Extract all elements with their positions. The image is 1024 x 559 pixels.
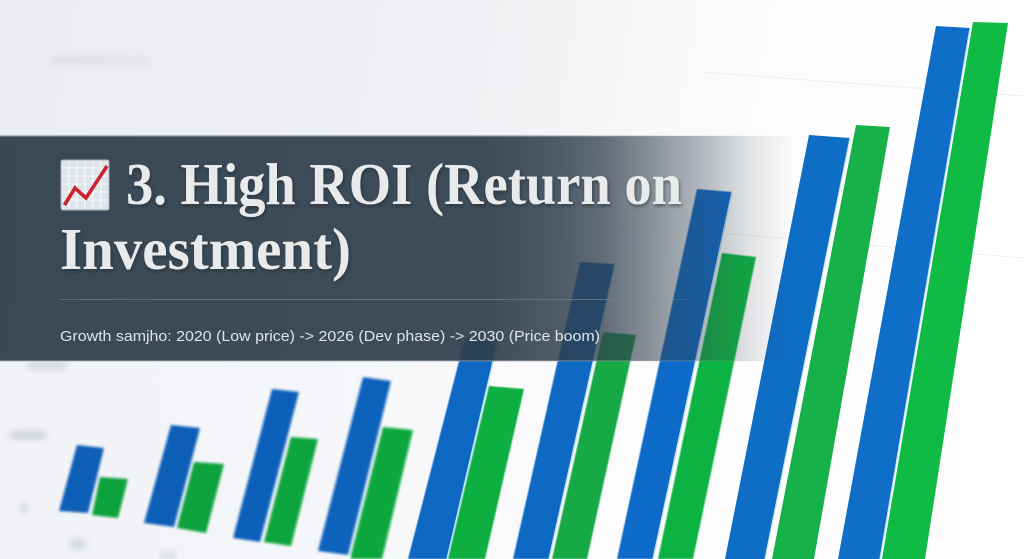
grid lines — [620, 72, 1024, 258]
bars group 5 to 7 — [408, 189, 756, 559]
blurred axis labels — [10, 58, 176, 559]
panel background — [0, 136, 1024, 361]
heading: 3. High ROI (Return on — [126, 151, 682, 217]
subtitle text: Growth samjho: 2020 (Low price) -> 2026 (Dev phase) -> 2030 (Price boom) — [60, 329, 600, 345]
panel bottom edge — [0, 360, 1024, 362]
bars group 8 and 9, in focus — [725, 22, 1008, 559]
heading — [60, 151, 682, 282]
divider — [60, 299, 690, 300]
panel top edge — [0, 135, 1024, 137]
light cyan edges between bars — [447, 28, 970, 559]
panel: title overlay — [0, 135, 1024, 362]
bars group 1 to 4, out of focus — [59, 377, 413, 559]
icon: chart increasing emoji — [61, 160, 109, 210]
heading: Investment) — [60, 216, 351, 282]
lower background area — [0, 355, 1024, 559]
